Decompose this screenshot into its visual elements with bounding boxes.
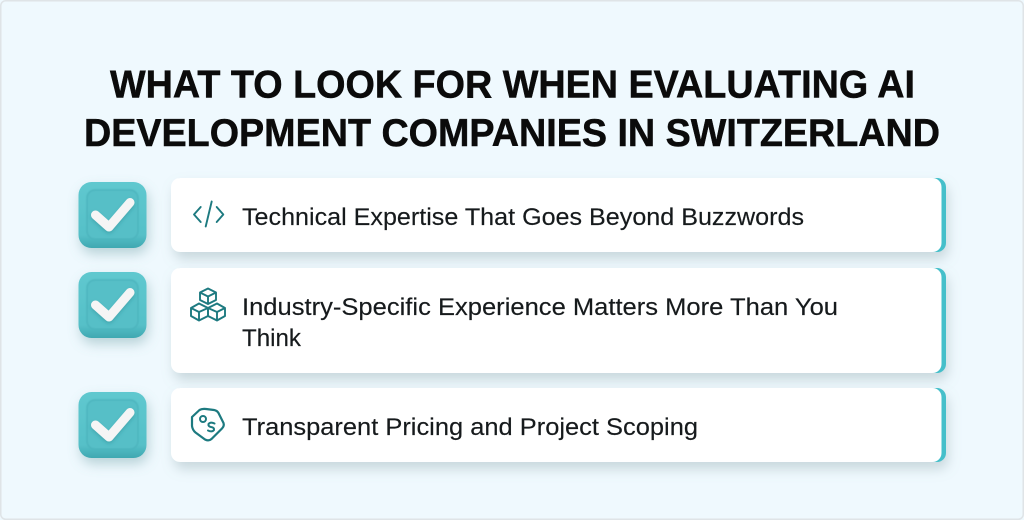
card 3 xyxy=(171,388,946,462)
checkbox icon 1 xyxy=(78,182,146,248)
icon: price tag xyxy=(192,409,224,440)
card 1 xyxy=(171,178,946,252)
checkbox icon 3 xyxy=(78,392,146,458)
title xyxy=(84,64,940,155)
card 2 text xyxy=(242,294,838,352)
title: WHAT TO LOOK FOR WHEN EVALUATING AI xyxy=(110,64,915,106)
card 3 text: Transparent Pricing and Project Scoping xyxy=(242,414,698,441)
icon: code xyxy=(194,202,223,226)
checkbox icon 2 xyxy=(78,272,146,338)
title: DEVELOPMENT COMPANIES IN SWITZERLAND xyxy=(84,112,940,155)
card 2 text: Industry-Specific Experience Matters More Than You xyxy=(242,294,838,321)
card 2 text: Think xyxy=(242,325,302,352)
card 1 text: Technical Expertise That Goes Beyond Buzzwords xyxy=(242,204,804,231)
icon: blocks xyxy=(191,288,225,320)
card 2 xyxy=(171,268,946,373)
